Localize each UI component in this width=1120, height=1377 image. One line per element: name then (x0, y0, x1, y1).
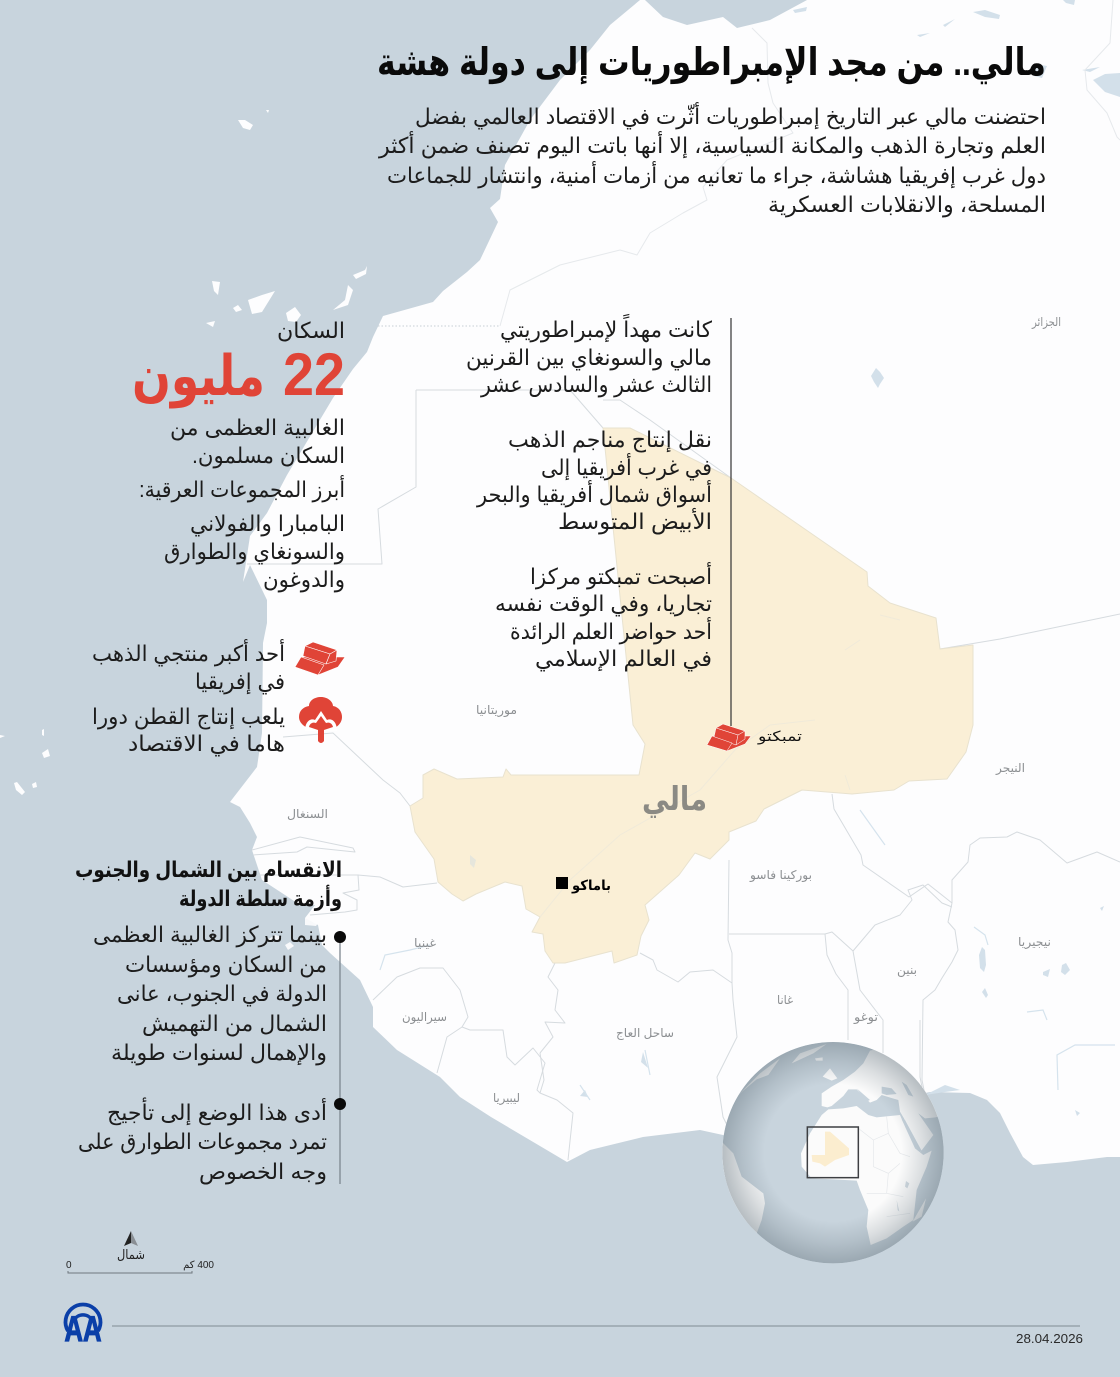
intro paragraph: المسلحة، والانقلابات العسكرية (768, 192, 1046, 217)
country labels: النيجر (995, 761, 1025, 776)
footer line (112, 1325, 1080, 1327)
cotton text (92, 704, 285, 757)
north arrow: شمال (117, 1247, 145, 1262)
country labels: غينيا (414, 936, 436, 950)
history text column (466, 313, 713, 672)
scale bar: 400 كم (183, 1260, 214, 1271)
country labels: ساحل العاج (616, 1026, 674, 1040)
date: 28.04.2026 (1016, 1331, 1083, 1346)
population figure: 22 (283, 341, 345, 408)
gold text: أحد أكبر منتجي الذهب (92, 639, 285, 667)
history text column: مالي والسونغاي بين القرنين (466, 345, 712, 371)
divide paragraph one: الشمال من التهميش (142, 1011, 327, 1037)
intro paragraph: احتضنت مالي عبر التاريخ إمبراطوريات أثّرت في الاقتصاد العالمي بفضل (415, 102, 1046, 130)
Anadolu Agency logo: AA (64, 1310, 102, 1349)
icon: gold bars (295, 642, 345, 675)
country labels: ليبيريا (493, 1091, 520, 1106)
divide paragraph one: والإهمال لسنوات طويلة (111, 1040, 327, 1065)
country labels: سيراليون (402, 1010, 447, 1025)
history text column: نقل إنتاج مناجم الذهب (508, 427, 712, 453)
country labels: بنين (897, 963, 917, 978)
history text column: أسواق شمال أفريقيا والبحر (476, 480, 712, 507)
gold text: في إفريقيا (195, 669, 285, 695)
history text column: أحد حواضر العلم الرائدة (510, 617, 712, 645)
history text column: تجاريا، وفي الوقت نفسه (495, 591, 712, 617)
population details: البامبارا والفولاني (190, 511, 345, 537)
history text column: في غرب أفريقيا إلى (541, 453, 712, 481)
divide paragraph one: بينما تتركز الغالبية العظمى (93, 922, 327, 947)
cotton text: يلعب إنتاج القطن دورا (92, 704, 285, 730)
country labels: غانا (777, 993, 793, 1007)
locator globe (720, 1040, 957, 1263)
timeline line and bullets (334, 931, 346, 1184)
intro paragraph (378, 102, 1046, 217)
icon: Timbuktu gold bars (707, 724, 751, 751)
icon: cotton (299, 697, 342, 743)
leader line to Timbuktu (730, 318, 732, 726)
divide paragraph two (78, 1097, 327, 1185)
history text column: الثالث عشر والسادس عشر (480, 372, 712, 398)
intro paragraph: العلم وتجارة الذهب والمكانة السياسية، إلا أنها باتت اليوم تصنف ضمن أكثر (378, 131, 1046, 159)
population details: الغالبية العظمى من (170, 415, 345, 440)
marker: Bamako (556, 877, 568, 889)
Mali shape (410, 428, 973, 963)
divide paragraph one: من السكان ومؤسسات (125, 952, 327, 977)
gold text (92, 639, 285, 695)
Anadolu Agency logo (64, 1304, 102, 1349)
map: country borders (247, 0, 1120, 1160)
cotton text: هاما في الاقتصاد (128, 731, 285, 757)
divide paragraph two: تمرد مجموعات الطوارق على (78, 1129, 327, 1154)
intro paragraph: دول غرب إفريقيا هشاشة، جراء ما تعانيه من أزمات أمنية، وانتشار للجماعات (387, 161, 1046, 189)
scale bar: 0 (66, 1260, 72, 1271)
country labels: نيجيريا (1018, 935, 1051, 950)
country labels: السنغال (287, 807, 328, 821)
label: Timbuktu: تمبكتو (757, 728, 802, 745)
scale bar (66, 1260, 214, 1273)
country labels (287, 315, 1061, 1106)
population details: والدوغون (263, 567, 345, 592)
country labels: الجزائر (1031, 315, 1061, 330)
population details: والسونغاي والطوارق (164, 539, 345, 564)
section heading: north south divide: الانقسام بين الشمال والجنوب (75, 858, 342, 882)
country labels: بوركينا فاسو (749, 868, 812, 883)
population figure: مليون (132, 344, 265, 409)
divide paragraph one (93, 922, 327, 1065)
population heading: السكان (277, 318, 345, 343)
history text column: أصبحت تمبكتو مركزا (530, 562, 712, 589)
north arrow (117, 1231, 145, 1262)
section heading: north south divide: وأزمة سلطة الدولة (179, 884, 342, 911)
section heading: north south divide (75, 858, 342, 911)
history text column: كانت مهداً لإمبراطوريتي (500, 313, 713, 343)
divide paragraph two: وجه الخصوص (199, 1159, 327, 1185)
history text column: في العالم الإسلامي (535, 646, 712, 672)
population details (139, 415, 345, 592)
divide paragraph two: أدى هذا الوضع إلى تأجيج (107, 1097, 327, 1126)
population details: أبرز المجموعات العرقية: (139, 475, 345, 502)
map: lakes and rivers (380, 368, 1115, 1116)
country labels: موريتانيا (476, 703, 517, 718)
label: Mali: مالي (642, 780, 707, 818)
divide paragraph one: الدولة في الجنوب، عانى (117, 981, 327, 1007)
population details: السكان مسلمون. (192, 443, 345, 468)
country labels: توغو (853, 1010, 878, 1025)
label: Bamako: باماكو (571, 877, 611, 894)
history text column: الأبيض المتوسط (558, 508, 712, 535)
